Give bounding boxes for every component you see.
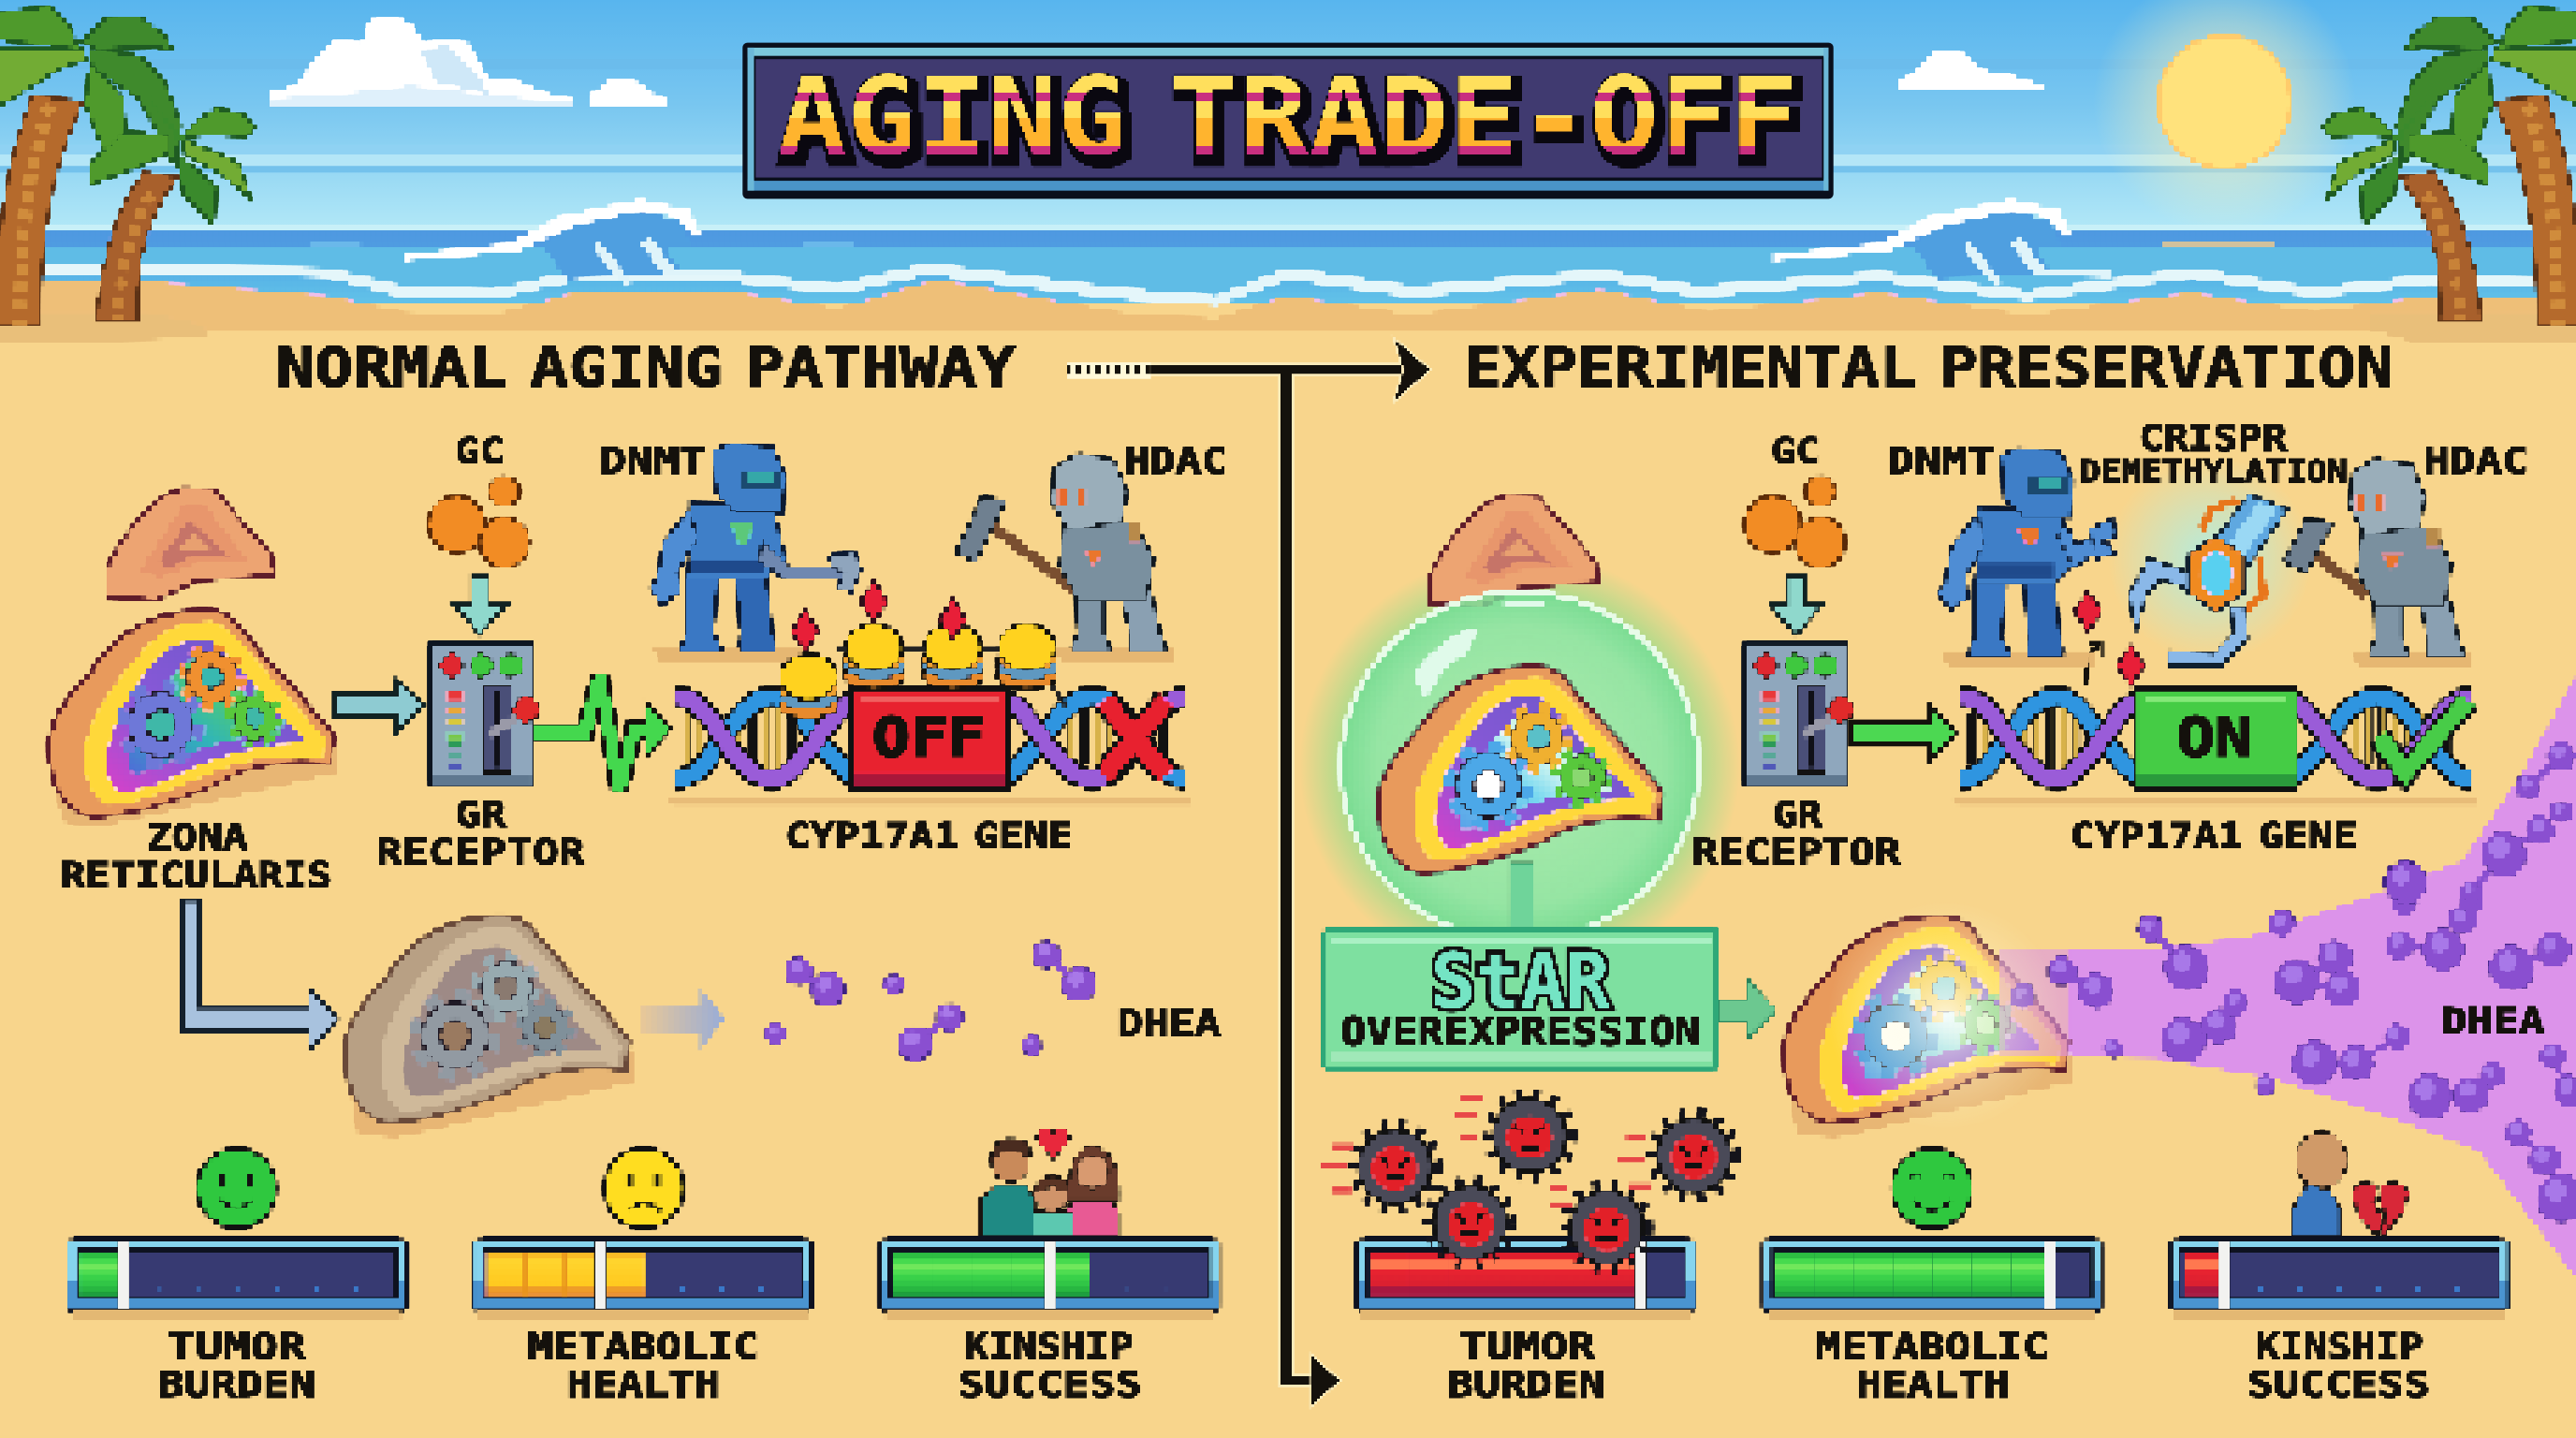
label reticularis: RETICULARIS bbox=[61, 855, 332, 897]
label cyp17a1 right: CYP17A1 GENE bbox=[2070, 815, 2358, 858]
status box: off bbox=[849, 687, 1010, 790]
label star: StAR bbox=[1431, 938, 1610, 1026]
label success right: SUCCESS bbox=[2247, 1364, 2430, 1406]
icon: dnmt robot right bbox=[1939, 448, 2116, 666]
icon: happy family bbox=[981, 1129, 1119, 1234]
icon: yellow sad face bbox=[605, 1149, 683, 1227]
label overexpression: OVEREXPRESSION bbox=[1340, 1008, 1701, 1054]
palm shadows bbox=[0, 313, 2576, 342]
main divider arrow bbox=[1066, 337, 1431, 1407]
label gr right: GR bbox=[1773, 794, 1822, 836]
label hdac left: HDAC bbox=[1123, 441, 1227, 483]
icon: dna strand right bbox=[1950, 697, 2476, 805]
label cyp17a1 left: CYP17A1 GENE bbox=[785, 815, 1073, 858]
bar: metabolic health right bbox=[1761, 1236, 2103, 1320]
label gc left: GC bbox=[455, 431, 505, 473]
bar: tumor burden right bbox=[1355, 1236, 1697, 1320]
label health left: HEALTH bbox=[567, 1364, 720, 1406]
arrow: l-shaped to aged zona bbox=[183, 901, 337, 1050]
label dhea right: DHEA bbox=[2441, 1001, 2545, 1043]
icon: gr receptor panel right bbox=[1743, 641, 1852, 787]
label receptor left: RECEPTOR bbox=[376, 831, 586, 873]
label on: ON bbox=[2177, 705, 2252, 769]
label gr left: GR bbox=[455, 794, 506, 836]
arrow: ecg signal bbox=[535, 677, 670, 789]
illustration layer bbox=[50, 444, 2576, 1320]
label metabolic right: METABOLIC bbox=[1815, 1327, 2049, 1369]
label receptor right: RECEPTOR bbox=[1692, 831, 1902, 873]
status box: on bbox=[2134, 687, 2298, 790]
icon: angry tumor cells bbox=[1323, 1094, 1734, 1267]
label hdac right: HDAC bbox=[2423, 441, 2528, 483]
icon: gc molecule left bbox=[429, 477, 529, 567]
icon: zona reticularis active bbox=[50, 610, 337, 827]
purple dhea stream bbox=[2070, 677, 2576, 1277]
title text: AGING TRADE-OFF bbox=[782, 61, 1804, 187]
bar: metabolic health left bbox=[472, 1236, 813, 1320]
icon: dna strand left bbox=[666, 697, 1191, 805]
label burden right: BURDEN bbox=[1447, 1364, 1605, 1406]
stream overlap on zona bbox=[1998, 950, 2070, 1057]
arrow: gc to receptor right bbox=[1771, 577, 1822, 635]
heading left: NORMAL AGING PATHWAY bbox=[276, 336, 1016, 400]
label kinship left: KINSHIP bbox=[964, 1327, 1134, 1369]
icon: red x bbox=[1104, 700, 1166, 776]
label tumor left: TUMOR bbox=[168, 1327, 306, 1369]
cloud left large bbox=[270, 17, 572, 107]
arrow: receptor to gene on bbox=[1852, 705, 1955, 761]
heading right: EXPERIMENTAL PRESERVATION bbox=[1464, 336, 2393, 400]
icon: released methyl marks bbox=[2075, 592, 2144, 685]
label demethylation: DEMETHYLATION bbox=[2080, 455, 2348, 489]
label kinship right: KINSHIP bbox=[2256, 1327, 2423, 1369]
icon: aged zona reticularis bbox=[345, 916, 633, 1137]
sea bbox=[0, 224, 2576, 304]
scene: sun, clouds, sea and palms bbox=[0, 7, 2576, 342]
arrow: faint dhea output bbox=[642, 990, 724, 1049]
icon: adrenal gland right bbox=[1431, 494, 1599, 607]
icon: gr receptor panel left bbox=[429, 641, 538, 787]
right dhea molecules bbox=[2009, 741, 2576, 1223]
label dnmt left: DNMT bbox=[600, 441, 707, 483]
white energy flash bbox=[1827, 901, 2063, 1131]
icon: green happy face right bbox=[1893, 1149, 1971, 1227]
star overexpression box bbox=[1323, 929, 1719, 1070]
arrow: zona to receptor bbox=[335, 681, 422, 731]
icon: hdac robot left bbox=[956, 453, 1175, 661]
icon: lonely person and broken heart bbox=[2293, 1132, 2408, 1236]
icon: dnmt robot left bbox=[651, 444, 861, 661]
green protective glow bbox=[1299, 457, 2311, 979]
bar: kinship success left bbox=[879, 1236, 1221, 1320]
left breaking wave bbox=[402, 198, 739, 285]
left palm trees bbox=[0, 7, 255, 324]
label tumor right: TUMOR bbox=[1459, 1327, 1596, 1369]
right breaking wave bbox=[1773, 198, 2110, 285]
left dhea molecules bbox=[766, 941, 1097, 1061]
label zona: ZONA bbox=[146, 817, 248, 859]
icon: nucleosome row bbox=[779, 581, 1068, 718]
label off: OFF bbox=[872, 705, 986, 769]
label gc right: GC bbox=[1771, 431, 1821, 473]
title text: AGING TRADE-OFF bbox=[777, 54, 1799, 181]
cloud left small bbox=[592, 79, 666, 107]
icon: protective bubble bbox=[1340, 592, 1699, 940]
icon: hdac robot right bbox=[2284, 459, 2472, 666]
bar: tumor burden left bbox=[66, 1236, 407, 1320]
icon: active glowing zona bbox=[1784, 916, 2071, 1137]
icon: green check bbox=[2378, 700, 2467, 772]
label metabolic left: METABOLIC bbox=[527, 1327, 759, 1369]
label health right: HEALTH bbox=[1856, 1364, 2009, 1406]
icon: gc molecule right bbox=[1745, 477, 1845, 567]
icon: adrenal gland left bbox=[107, 488, 274, 600]
icon: preserved zona reticularis bbox=[1379, 667, 1662, 873]
title plaque bbox=[742, 43, 1834, 198]
label dhea left: DHEA bbox=[1117, 1003, 1221, 1045]
label crispr: CRISPR bbox=[2139, 418, 2288, 460]
right palm trees bbox=[2323, 7, 2576, 324]
arrow: gc to receptor left bbox=[455, 577, 506, 635]
arrow: star to zona bbox=[1720, 981, 1776, 1038]
label success left: SUCCESS bbox=[958, 1364, 1142, 1406]
icon: crispr claw bbox=[2130, 494, 2287, 666]
wet sand and foam shoreline bbox=[0, 246, 2576, 329]
label dnmt right: DNMT bbox=[1888, 441, 1995, 483]
bar: kinship success right bbox=[2169, 1236, 2510, 1320]
icon: green smile face left bbox=[198, 1149, 276, 1227]
sun bbox=[2159, 37, 2291, 168]
label burden left: BURDEN bbox=[157, 1364, 315, 1406]
cloud right bbox=[1897, 50, 2043, 91]
